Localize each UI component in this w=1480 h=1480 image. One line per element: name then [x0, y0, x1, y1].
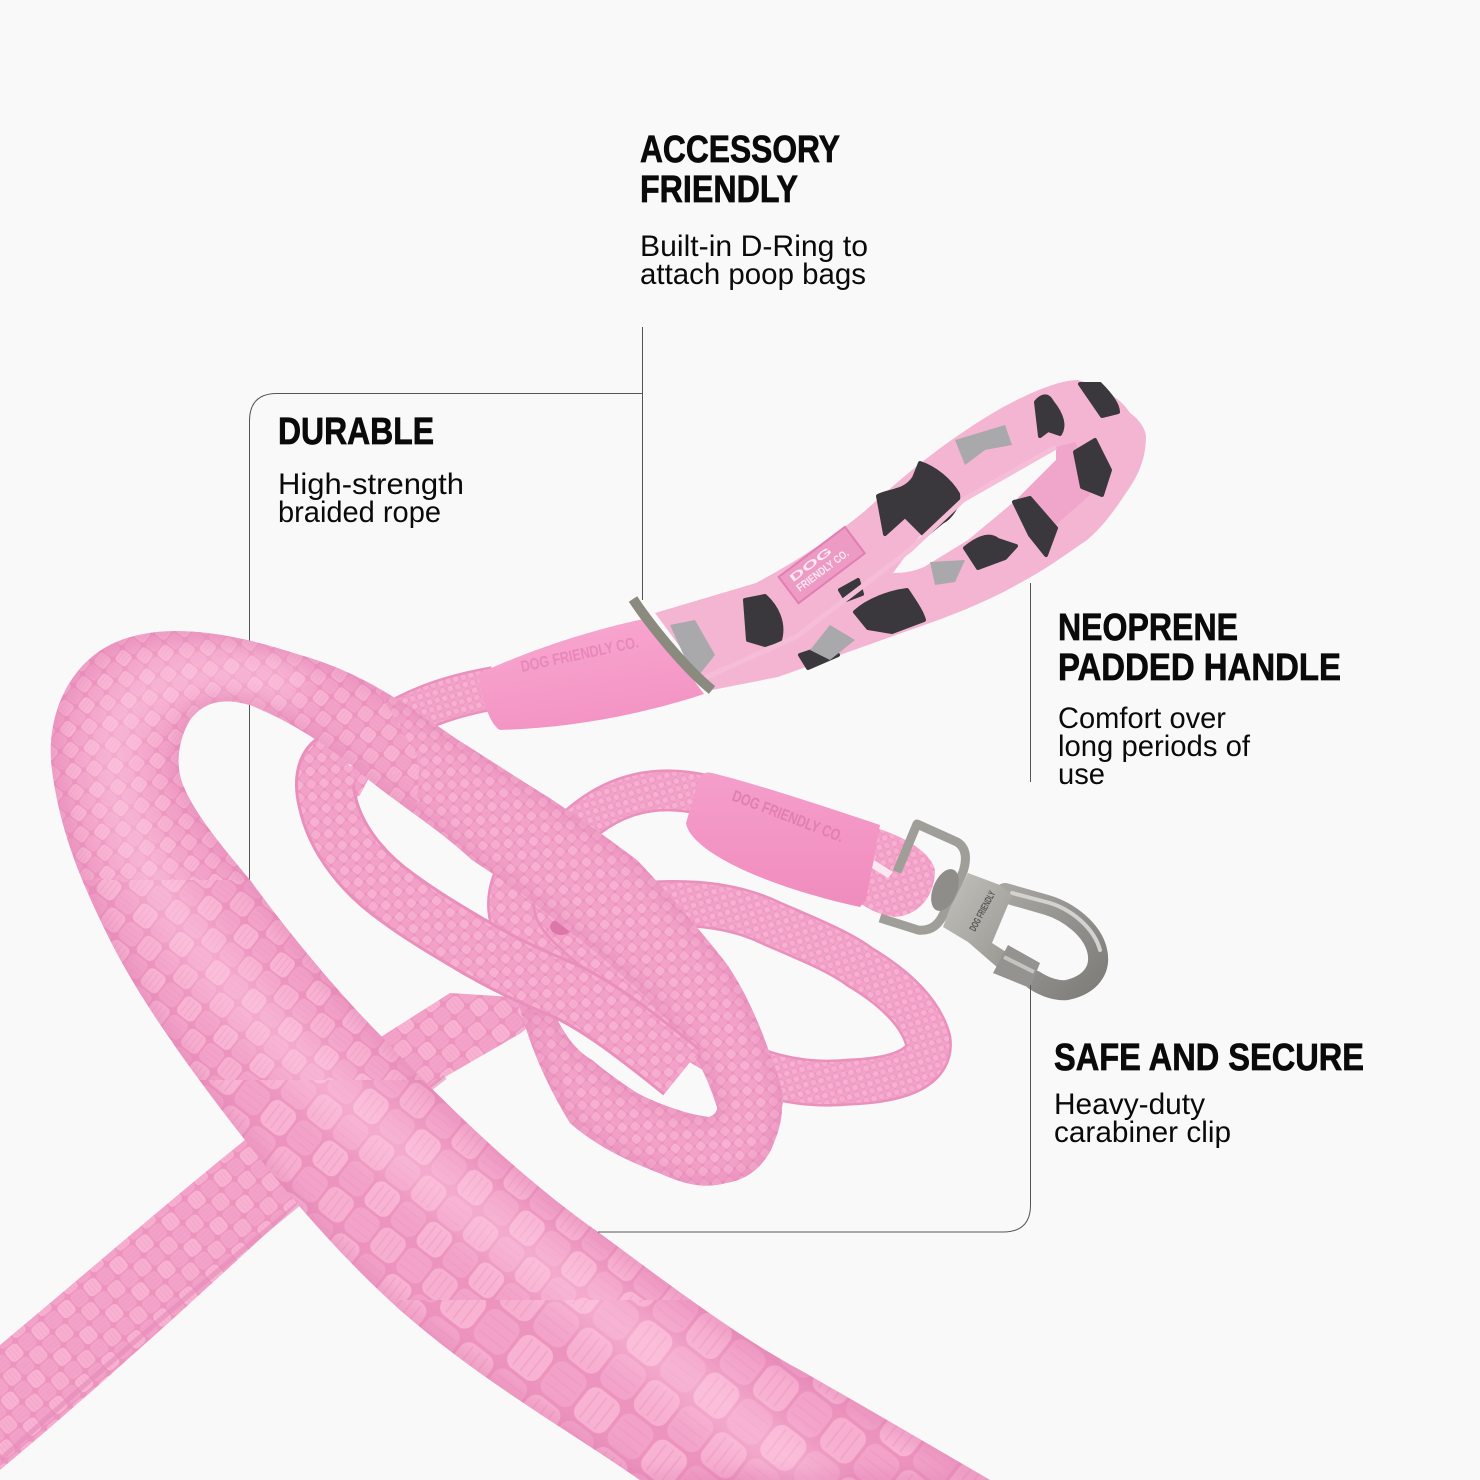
- heading: [1058, 607, 1341, 689]
- heading: PADDED HANDLE: [1058, 647, 1341, 689]
- body: Heavy-duty: [1054, 1088, 1205, 1121]
- gate: [993, 945, 1040, 988]
- body: Comfort over: [1058, 702, 1226, 735]
- upper ferrule: DOG FRIENDLY CO.: [519, 634, 640, 676]
- back rope lower left: [0, 993, 560, 1470]
- leader line: safe and secure: [598, 985, 1030, 1232]
- main braided rope: [50, 631, 990, 1480]
- body: [640, 230, 868, 291]
- woven tag: FRIENDLY CO.: [795, 548, 851, 594]
- hook: [1005, 893, 1098, 990]
- body: braided rope: [278, 496, 441, 529]
- body: Built-in D-Ring to: [640, 230, 868, 263]
- rope: right loop: [640, 904, 928, 1083]
- camo grey patches: [670, 425, 1012, 680]
- callout: durable: [278, 411, 464, 529]
- heading: ACCESSORY: [640, 129, 840, 171]
- carabiner clip: [880, 824, 1100, 990]
- lower ferrule: [686, 772, 880, 907]
- callout: neoprene padded handle: [1058, 607, 1341, 791]
- leader line: durable and accessory friendly: [250, 327, 642, 882]
- handle rim edge: [700, 447, 1056, 680]
- heading: DURABLE: [278, 411, 434, 453]
- body: long periods of: [1058, 730, 1251, 763]
- woven tag: [779, 527, 865, 603]
- body: use: [1058, 758, 1105, 791]
- swivel ring: [880, 824, 965, 930]
- callout: accessory friendly: [640, 129, 868, 291]
- rope: knot piece: [510, 865, 720, 1080]
- rope: curl at clip: [860, 827, 935, 917]
- clip engraving: DOG FRIENDLY: [968, 889, 998, 933]
- handle shape: [655, 380, 1146, 690]
- clip body: [943, 873, 1012, 968]
- D-ring: [633, 599, 712, 690]
- rope: top ferrule tail: [395, 688, 495, 722]
- upper ferrule: [478, 618, 704, 730]
- rope: ferrule ring: [555, 790, 705, 850]
- swivel: [926, 865, 964, 915]
- heading: [640, 129, 840, 211]
- body: [1054, 1088, 1231, 1149]
- heading: SAFE AND SECURE: [1054, 1037, 1364, 1079]
- heading: FRIENDLY: [640, 169, 798, 211]
- back inner band: [1016, 442, 1090, 530]
- neoprene handle: [655, 380, 1146, 690]
- rope: left ring front segment: [470, 944, 682, 1072]
- ferrule embossed logo: DOG FRIENDLY CO.: [730, 788, 846, 846]
- body: carabiner clip: [1054, 1116, 1231, 1149]
- leash illustration: [0, 380, 1146, 1480]
- body: attach poop bags: [640, 258, 866, 291]
- heading: NEOPRENE: [1058, 607, 1238, 649]
- body: [278, 468, 464, 529]
- rope: left ring: [325, 759, 480, 950]
- woven tag: DOG: [787, 545, 835, 585]
- leader line: neoprene handle: [1030, 583, 1032, 782]
- camo dark patches: [745, 384, 1118, 668]
- callout: safe and secure: [1054, 1037, 1364, 1149]
- rope shading: [115, 672, 830, 1480]
- body: High-strength: [278, 468, 464, 501]
- body: [1058, 702, 1251, 791]
